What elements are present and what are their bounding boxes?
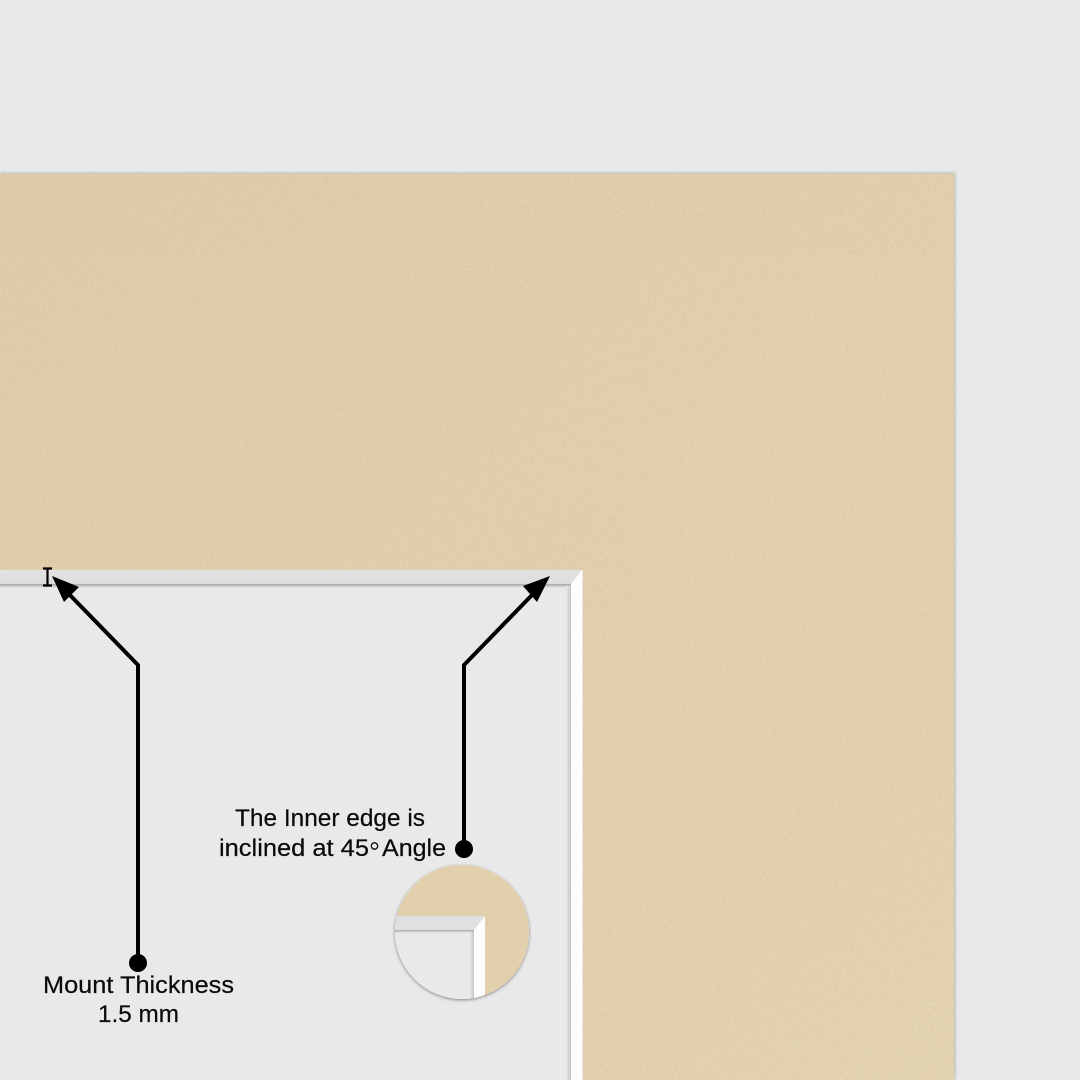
top bevel shadow xyxy=(0,584,571,588)
text: mount thickness label xyxy=(43,972,234,1028)
top bevel xyxy=(0,570,582,584)
text: inner edge label: inclined at 45 xyxy=(219,835,369,862)
arrow: mount thickness xyxy=(52,576,147,972)
callout: magnified corner detail xyxy=(393,864,531,1002)
panel: window opening with bevel xyxy=(0,570,583,1080)
text: inner edge label xyxy=(219,805,446,862)
magnified right bevel shadow xyxy=(470,932,474,1004)
magnified right bevel xyxy=(474,916,485,1005)
text: inner edge label: Angle xyxy=(382,835,446,862)
icon: thickness marker xyxy=(43,568,52,586)
text: mount thickness label: Mount Thickness xyxy=(43,972,234,999)
panel: mount board xyxy=(0,173,955,1080)
arrow: inner edge xyxy=(455,576,550,858)
magnified mount board xyxy=(395,865,529,999)
magnified top bevel shadow xyxy=(395,930,474,932)
right bevel shadow xyxy=(566,586,571,1080)
text: inner edge label: The Inner edge is xyxy=(235,805,425,832)
magnified window xyxy=(395,916,485,999)
text: mount thickness label: 1.5 mm xyxy=(98,1001,179,1028)
magnified top bevel xyxy=(390,916,485,930)
right bevel xyxy=(571,570,582,1080)
